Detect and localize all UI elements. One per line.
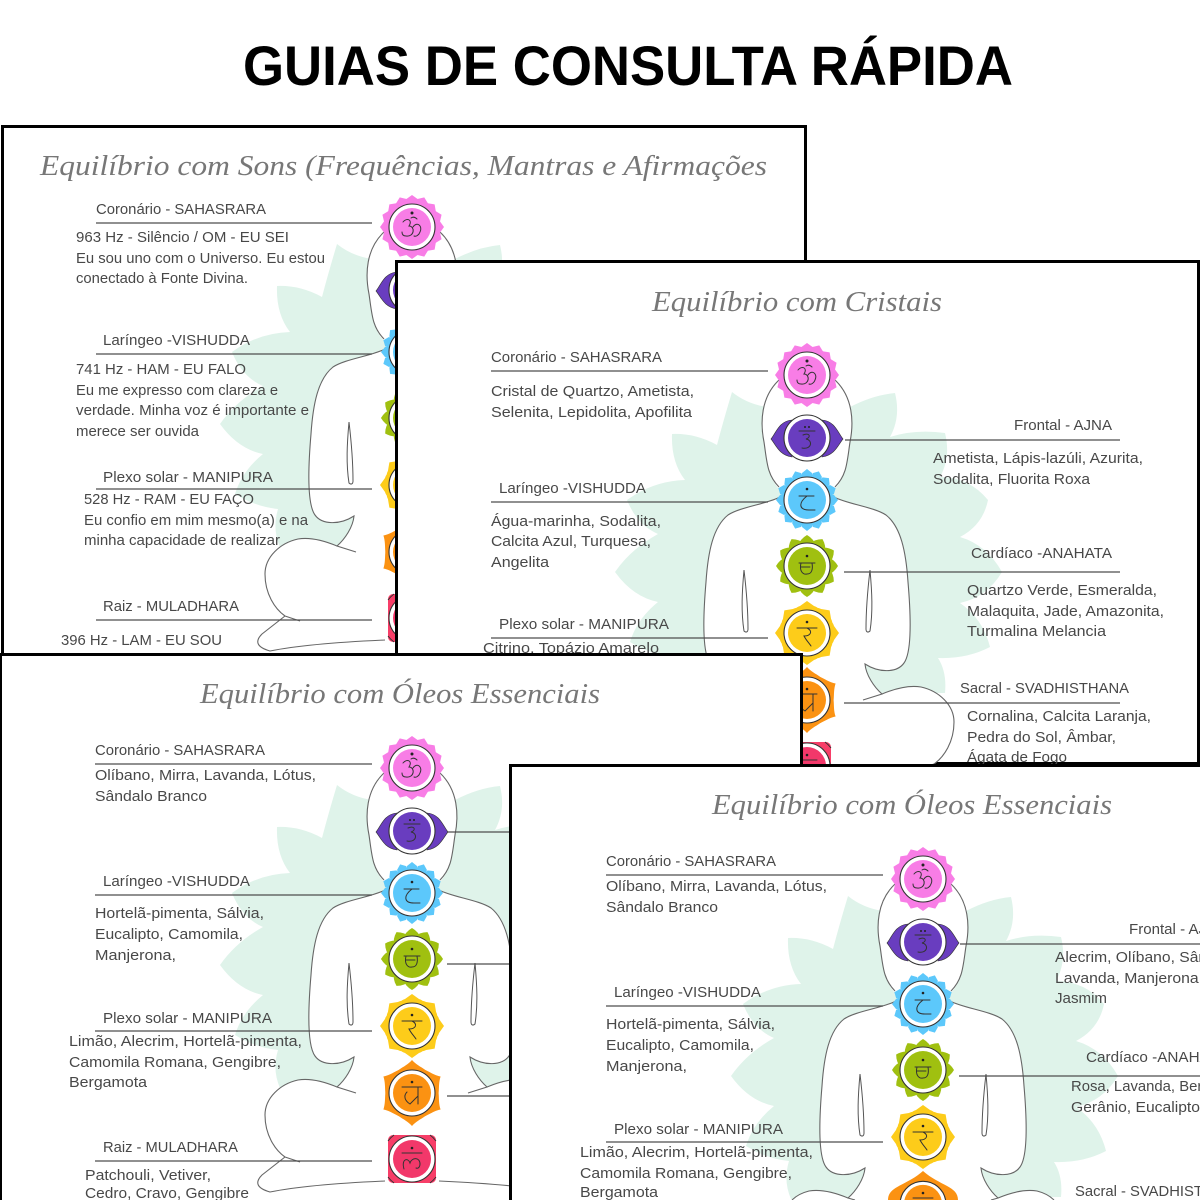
text block: laringeo: Laríngeo -VISHUDDA — [103, 332, 250, 349]
title: GUIAS DE CONSULTA RÁPIDA — [243, 34, 1013, 97]
text block: plexo solar: Bergamota — [69, 1074, 148, 1091]
chakra: root — [783, 742, 831, 790]
text block: coronario — [76, 201, 325, 287]
chakra: throat — [381, 321, 443, 383]
text block: coronario: Coronário - SAHASRARA — [96, 201, 266, 218]
text block: laringeo: Hortelã-pimenta, Sálvia, — [95, 905, 264, 922]
text block: laringeo: Angelita — [491, 554, 550, 571]
text block: laringeo: Eu me expresso com clareza e — [76, 382, 278, 399]
text block: frontal — [1055, 921, 1200, 1007]
chakra: heart — [381, 387, 443, 449]
chakra: crown — [379, 194, 445, 260]
text block: plexo solar: Camomila Romana, Gengibre, — [69, 1054, 281, 1071]
figure with lotus: oleos — [731, 881, 1118, 1200]
text block: plexo solar: Plexo solar - MANIPURA — [103, 1010, 272, 1027]
text block: cardiaco — [967, 545, 1164, 640]
chakra: third eye — [887, 919, 959, 965]
text block: coronario: Coronário - SAHASRARA — [606, 853, 776, 870]
text block: plexo solar: Citrino, Topázio Amarelo — [483, 640, 659, 657]
heading: oleos: Equilíbrio com Óleos Essenciais — [199, 677, 600, 710]
chakra: crown — [379, 735, 445, 801]
chakra: sacral — [374, 519, 450, 585]
chakra: solar plexus — [891, 1105, 955, 1169]
figure with lotus: cristais — [615, 377, 1002, 807]
heading: sons: Equilíbrio com Sons (Frequências, Mantras e Afirmações — [39, 150, 767, 182]
text block: cardiaco: Cardíaco -ANAHATA — [971, 545, 1112, 562]
text block: coronario — [606, 853, 827, 916]
text block: laringeo: Laríngeo -VISHUDDA — [103, 873, 250, 890]
chakra: third eye — [376, 267, 448, 313]
text block: frontal: Jasmim — [1055, 990, 1107, 1007]
text block: laringeo: Calcita Azul, Turquesa, — [491, 533, 651, 550]
panel: equilibrio com oleos essenciais, left — [0, 654, 802, 1200]
figure with lotus: sons — [220, 229, 607, 659]
chakra: sacral — [374, 1060, 450, 1126]
text block: frontal: Ametista, Lápis-lazúli, Azurita, — [933, 450, 1143, 467]
panel: equilibrio com sons — [2, 126, 806, 686]
text block: coronario — [491, 349, 694, 421]
chakra: throat — [381, 862, 443, 924]
text block: coronario: Sândalo Branco — [606, 899, 718, 916]
text block: laringeo — [76, 332, 309, 440]
chakra: solar plexus — [775, 601, 839, 665]
chakra: root — [388, 1135, 436, 1183]
text block: frontal: Frontal - AJNA — [1014, 417, 1112, 434]
chakra: throat — [892, 973, 954, 1035]
text block: plexo solar — [483, 616, 669, 657]
text block: plexo solar: Limão, Alecrim, Hortelã-pimenta, — [580, 1144, 813, 1161]
heading: cristais: Equilíbrio com Cristais — [651, 286, 942, 318]
text block: plexo solar — [580, 1121, 813, 1200]
figure with lotus: oleos — [220, 770, 607, 1200]
text block: coronario: Selenita, Lepidolita, Apofilita — [491, 404, 693, 421]
heading: oleos: Equilíbrio com Óleos Essenciais — [711, 788, 1112, 821]
chakra: third eye — [376, 808, 448, 854]
text block: coronario: conectado à Fonte Divina. — [76, 270, 248, 287]
chakra: throat — [776, 469, 838, 531]
text block: sacral: Cornalina, Calcita Laranja, — [967, 708, 1151, 725]
text block: sacral — [960, 680, 1151, 766]
text block: laringeo: Eucalipto, Camomila, — [606, 1037, 754, 1054]
text block: cardiaco: Gerânio, Eucalipto — [1071, 1099, 1200, 1116]
text block: laringeo: Água-marinha, Sodalita, — [491, 513, 661, 530]
text block: coronario: Olíbano, Mirra, Lavanda, Lótus, — [606, 878, 827, 895]
text block: laringeo: 741 Hz - HAM - EU FALO — [76, 361, 246, 378]
text block: sacral: Sacral - SVADHISTHANA — [960, 680, 1129, 697]
chakra: heart — [381, 928, 443, 990]
text block: frontal: Sodalita, Fluorita Roxa — [933, 471, 1091, 488]
text block: laringeo: verdade. Minha voz é importante e — [76, 402, 309, 419]
text block: raiz — [85, 1139, 249, 1200]
text block: raiz: Patchouli, Vetiver, — [85, 1167, 211, 1184]
chakra: sacral, cut by the page edge — [888, 1171, 958, 1200]
chakra: crown — [890, 846, 956, 912]
text block: sacral: Pedra do Sol, Âmbar, — [967, 729, 1116, 746]
text block: laringeo: merece ser ouvida — [76, 423, 200, 440]
text block: plexo solar: Plexo solar - MANIPURA — [614, 1121, 783, 1138]
text block: plexo solar: Limão, Alecrim, Hortelã-pimenta, — [69, 1033, 302, 1050]
text block: coronario: Coronário - SAHASRARA — [95, 742, 265, 759]
text block: raiz: 396 Hz - LAM - EU SOU — [61, 632, 222, 649]
text block: sacral: Ágata de Fogo — [967, 749, 1067, 766]
text block: laringeo: Eucalipto, Camomila, — [95, 926, 243, 943]
text block: coronario: Cristal de Quartzo, Ametista, — [491, 383, 694, 400]
text block: frontal — [933, 417, 1143, 488]
text block: coronario: 963 Hz - Silêncio / OM - EU SEI — [76, 229, 289, 246]
text block: plexo solar: Plexo solar - MANIPURA — [499, 616, 669, 633]
chakra: sacral — [769, 667, 845, 733]
text block: coronario: Sândalo Branco — [95, 788, 207, 805]
text block: coronario: Eu sou uno com o Universo. Eu estou — [76, 250, 325, 267]
text block: raiz: Raiz - MULADHARA — [103, 1139, 238, 1156]
text block: coronario: Olíbano, Mirra, Lavanda, Lótus, — [95, 767, 316, 784]
text block: plexo solar: Plexo solar - MANIPURA — [103, 469, 273, 486]
text block: plexo solar — [69, 1010, 302, 1091]
chakra: heart — [776, 535, 838, 597]
text block: laringeo: Manjerona, — [95, 947, 176, 964]
panel: equilibrio com cristais — [396, 262, 1198, 807]
chakra: root — [388, 594, 436, 642]
text block: laringeo: Laríngeo -VISHUDDA — [499, 480, 646, 497]
text block: cardiaco: Quartzo Verde, Esmeralda, — [967, 582, 1157, 599]
panel: equilibrio com oleos essenciais, right — [510, 766, 1200, 1200]
text block: plexo solar: 528 Hz - RAM - EU FAÇO — [84, 491, 254, 508]
text block: cardiaco: Malaquita, Jade, Amazonita, — [967, 603, 1164, 620]
text block: coronario: Coronário - SAHASRARA — [491, 349, 662, 366]
text block: cardiaco — [1071, 1049, 1200, 1116]
text block: plexo solar: Camomila Romana, Gengibre, — [580, 1165, 792, 1182]
chakra: third eye — [771, 415, 843, 461]
text block: raiz: Raiz - MULADHARA — [103, 598, 239, 615]
text block: cardiaco: Turmalina Melancia — [967, 623, 1107, 640]
text block: plexo solar: Eu confio em mim mesmo(a) e na — [84, 512, 309, 529]
text block: frontal: Lavanda, Manjerona, — [1055, 970, 1200, 987]
text block: laringeo: Manjerona, — [606, 1058, 687, 1075]
chakra: heart — [892, 1039, 954, 1101]
text block: laringeo — [95, 873, 264, 964]
text block: coronario — [95, 742, 316, 805]
chakra: solar plexus — [380, 453, 444, 517]
text block: laringeo — [491, 480, 661, 571]
text block: laringeo: Laríngeo -VISHUDDA — [614, 984, 761, 1001]
text block: raiz — [61, 598, 239, 649]
chakra: solar plexus — [380, 994, 444, 1058]
text block: plexo solar — [84, 469, 309, 549]
chakra: crown — [774, 342, 840, 408]
text block: laringeo: Hortelã-pimenta, Sálvia, — [606, 1016, 775, 1033]
text block: laringeo — [606, 984, 775, 1075]
text block: plexo solar: minha capacidade de realizar — [84, 532, 280, 549]
